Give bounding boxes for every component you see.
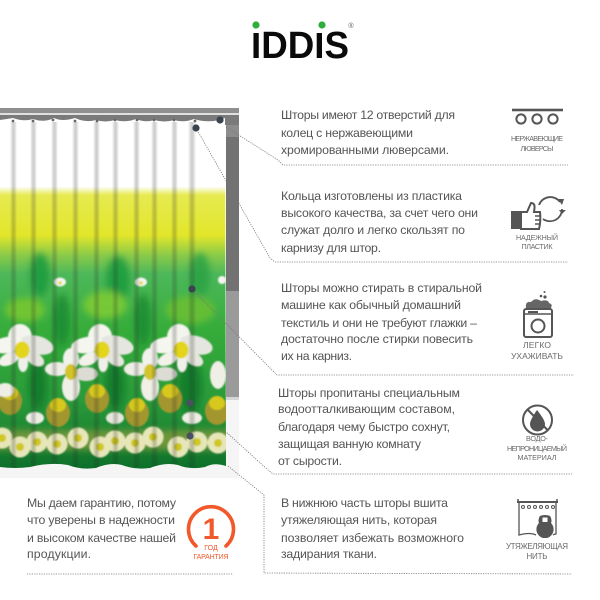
caption: washing bbox=[511, 340, 563, 361]
badge: 1 year guarantee: ГОД bbox=[204, 545, 218, 552]
curtain rail bbox=[0, 108, 239, 137]
caption: water repellent: НЕПРОНИЦАЕМЫЙ bbox=[507, 444, 567, 453]
text: guarantee bbox=[27, 496, 177, 561]
text: guarantee: продукции. bbox=[27, 547, 91, 561]
text: guarantee: и высоком качестве нашей bbox=[27, 531, 176, 545]
text: washing: их на карниз. bbox=[281, 349, 352, 363]
caption: weighted thread bbox=[506, 542, 568, 561]
text: grommets bbox=[281, 108, 455, 157]
text: washing: машине как обычный домашний bbox=[281, 298, 461, 312]
text: washing: Шторы можно стирать в стиральной bbox=[281, 281, 482, 295]
caption: washing: УХАЖИВАТЬ bbox=[511, 351, 563, 361]
text: water repellent bbox=[278, 386, 460, 468]
text: weighted thread: утяжеляющая нить, которая bbox=[281, 513, 437, 527]
text: water repellent: от сырости. bbox=[278, 454, 342, 468]
icon: curtain with kettlebell bbox=[517, 499, 558, 538]
text: guarantee: Мы даем гарантию, потому bbox=[27, 496, 177, 510]
caption: rings: ПЛАСТИК bbox=[522, 242, 553, 251]
icon: grommets bbox=[512, 109, 563, 124]
icon: thumb and ring bbox=[511, 197, 566, 229]
badge: 1 year guarantee bbox=[189, 507, 234, 561]
text: rings: карнизу для штор. bbox=[281, 241, 381, 255]
text: grommets: хромированными люверсами. bbox=[281, 143, 449, 157]
text: water repellent: защищая ванную комнату bbox=[278, 437, 422, 451]
caption: weighted thread: НИТЬ bbox=[526, 552, 548, 561]
text: weighted thread: В нижнюю часть шторы вшита bbox=[281, 496, 448, 510]
clusters bbox=[0, 386, 22, 415]
caption: water repellent: ВОДО- bbox=[526, 434, 549, 443]
text: rings: высокого качества, за счет чего они bbox=[281, 206, 478, 220]
caption: water repellent bbox=[507, 434, 567, 462]
text: weighted thread bbox=[281, 496, 464, 561]
caption: washing: ЛЕГКО bbox=[523, 340, 551, 350]
text: rings bbox=[281, 189, 478, 255]
text: grommets: колец с нержавеющими bbox=[281, 126, 413, 140]
callout markers and leader lines bbox=[27, 116, 574, 574]
text: grommets: Шторы имеют 12 отверстий для bbox=[281, 108, 455, 122]
edge petals bbox=[210, 361, 226, 389]
small daisies, bottom row bbox=[0, 428, 12, 448]
text: washing: текстиль и они не требуют глажки – bbox=[281, 316, 477, 330]
curtain fabric bbox=[0, 118, 226, 469]
text: weighted thread: позволяет избежать возможного bbox=[281, 531, 464, 545]
text: washing: достаточно после стирки повесить bbox=[281, 332, 473, 346]
grommets bbox=[12, 119, 196, 122]
text: weighted thread: задирания ткани. bbox=[281, 547, 377, 561]
logo: IDDIS: IDDIS bbox=[251, 25, 349, 67]
curtain folds bbox=[10, 122, 196, 467]
text: rings: Кольца изготовлены из пластика bbox=[281, 189, 462, 203]
text: rings: служат долго и легко скользят по bbox=[281, 223, 465, 237]
caption: grommets: НЕРЖАВЕЮЩИЕ bbox=[511, 134, 563, 143]
text: guarantee: что уверены в надежности bbox=[27, 513, 175, 527]
caption: grommets bbox=[511, 134, 563, 153]
panel: curtain photo bbox=[0, 108, 239, 478]
text: washing bbox=[281, 281, 482, 363]
wall and tiles bbox=[0, 125, 239, 478]
icon: water drop crossed bbox=[523, 406, 552, 434]
text: water repellent: водоотталкивающим составом, bbox=[278, 402, 455, 416]
text: water repellent: благодаря чему быстро сохнут, bbox=[278, 420, 450, 434]
meadow pattern bbox=[0, 253, 236, 458]
caption: rings bbox=[516, 233, 558, 251]
logo: IDDIS: ® bbox=[348, 22, 354, 30]
small daisies, top row bbox=[54, 276, 226, 286]
caption: water repellent: МАТЕРИАЛ bbox=[518, 453, 557, 462]
large daisies bbox=[0, 324, 56, 372]
text: water repellent: Шторы пропитаны специальным bbox=[278, 386, 460, 400]
caption: rings: НАДЕЖНЫЙ bbox=[516, 233, 558, 242]
caption: weighted thread: УТЯЖЕЛЯЮЩАЯ bbox=[506, 542, 568, 551]
caption: grommets: ЛЮВЕРСЫ bbox=[520, 144, 554, 153]
icon: washing machine bbox=[524, 291, 552, 337]
badge: 1 year guarantee: ГАРАНТИЯ bbox=[194, 554, 228, 561]
badge: 1 year guarantee: 1 bbox=[203, 513, 219, 546]
